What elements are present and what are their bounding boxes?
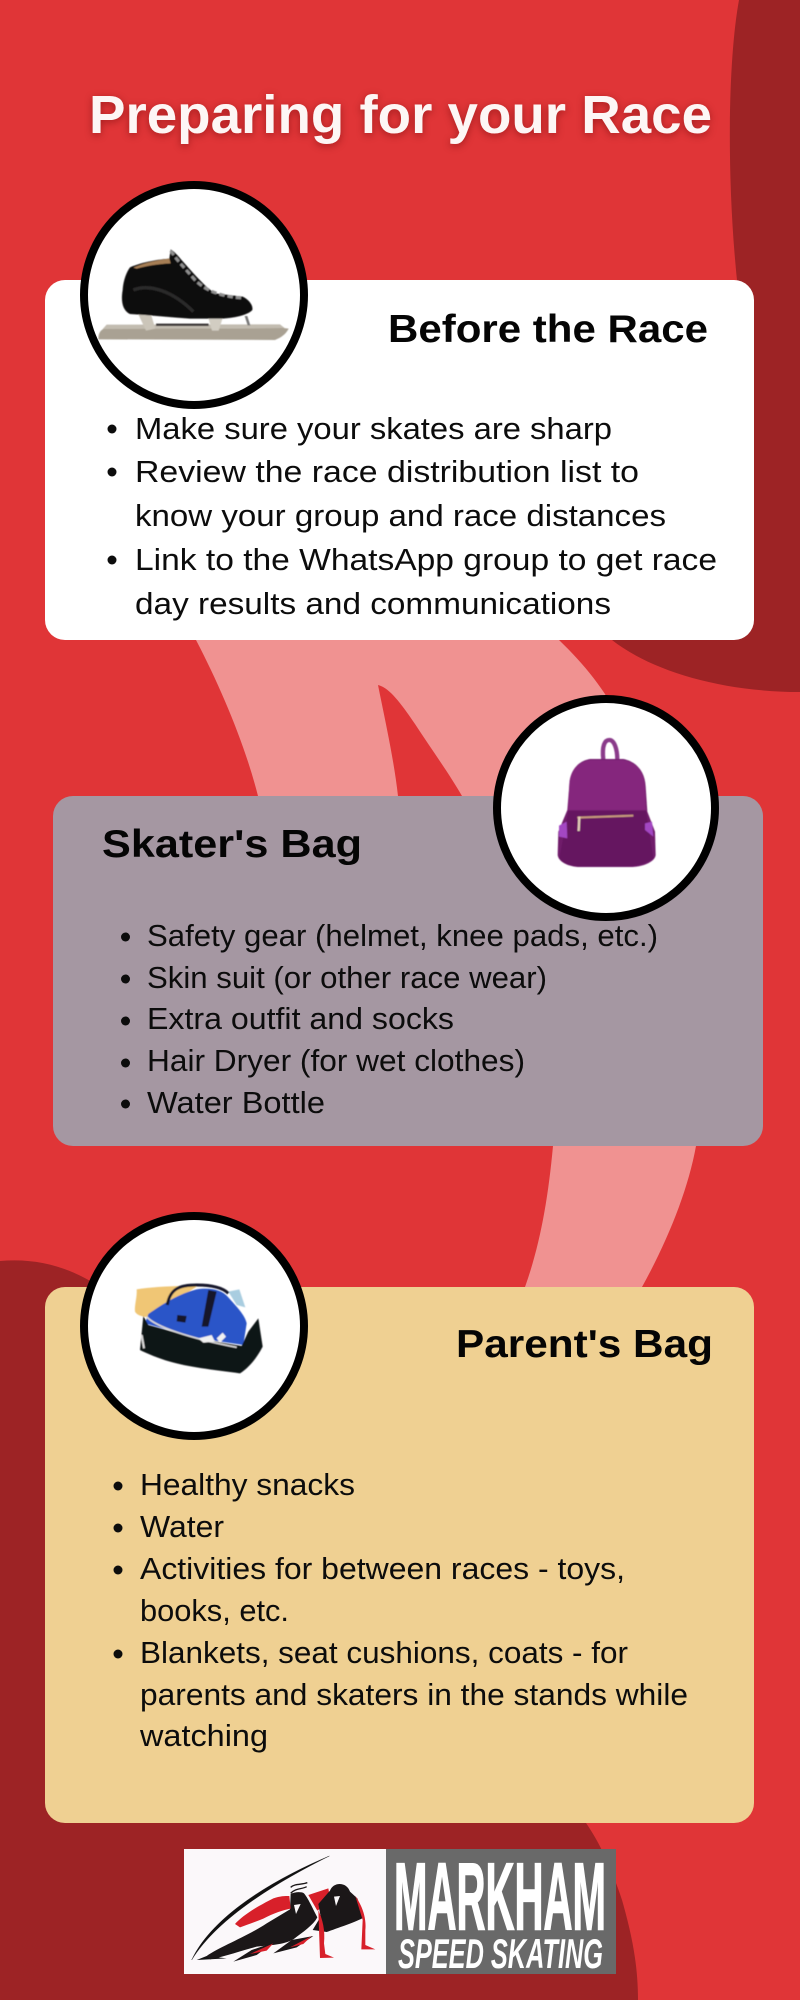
panel: before the race <box>45 185 754 640</box>
icon: duffel bag in circle <box>84 1216 304 1436</box>
bullet list: skater's bag: Safety gear (helmet, knee pads, etc.) <box>147 918 658 953</box>
bullet list: before the race: Link to the WhatsApp group to get race <box>135 542 717 577</box>
bullet list: parent's bag: Healthy snacks <box>140 1467 355 1502</box>
bullet list: before the race: know your group and race distances <box>135 498 666 533</box>
bullet list: skater's bag: Hair Dryer (for wet clothes) <box>147 1043 525 1078</box>
icon: backpack in circle <box>497 699 715 917</box>
bullet list: before the race <box>108 411 717 621</box>
bullet list: parent's bag: Blankets, seat cushions, coats - for <box>140 1635 628 1670</box>
logo: Markham Speed Skating <box>184 1844 616 1977</box>
icon: speed skate in circle <box>84 185 304 405</box>
bullet list: before the race: Review the race distribution list to <box>135 454 639 489</box>
bullet list: skater's bag: Extra outfit and socks <box>147 1001 454 1036</box>
heading: before the race: Before the Race <box>388 308 708 351</box>
bullet list: skater's bag <box>121 918 658 1120</box>
title: Preparing for your Race <box>89 85 712 145</box>
heading: parent's bag: Parent's Bag <box>456 1323 713 1366</box>
logo wordmark: Speed Skating: SPEED SKATING <box>398 1930 603 1977</box>
bullet list: before the race: Make sure your skates are sharp <box>135 411 612 446</box>
bullet list: parent's bag: books, etc. <box>140 1593 289 1628</box>
panel: skater's bag <box>53 699 763 1146</box>
bullet list: skater's bag: Skin suit (or other race wear) <box>147 960 547 995</box>
bullet list: skater's bag: Water Bottle <box>147 1085 325 1120</box>
logo emblem: two speed skaters <box>192 1856 375 1962</box>
bullet list: parent's bag: Activities for between races - toys, <box>140 1551 625 1586</box>
bullet list: parent's bag <box>114 1467 688 1753</box>
bullet list: parent's bag: Water <box>140 1509 224 1544</box>
bullet list: parent's bag: parents and skaters in the stands while <box>140 1677 688 1712</box>
heading: skater's bag: Skater's Bag <box>102 823 362 866</box>
panel: parent's bag <box>45 1216 754 1823</box>
bullet list: before the race: day results and communications <box>135 586 611 621</box>
bullet list: parent's bag: watching <box>139 1718 268 1753</box>
